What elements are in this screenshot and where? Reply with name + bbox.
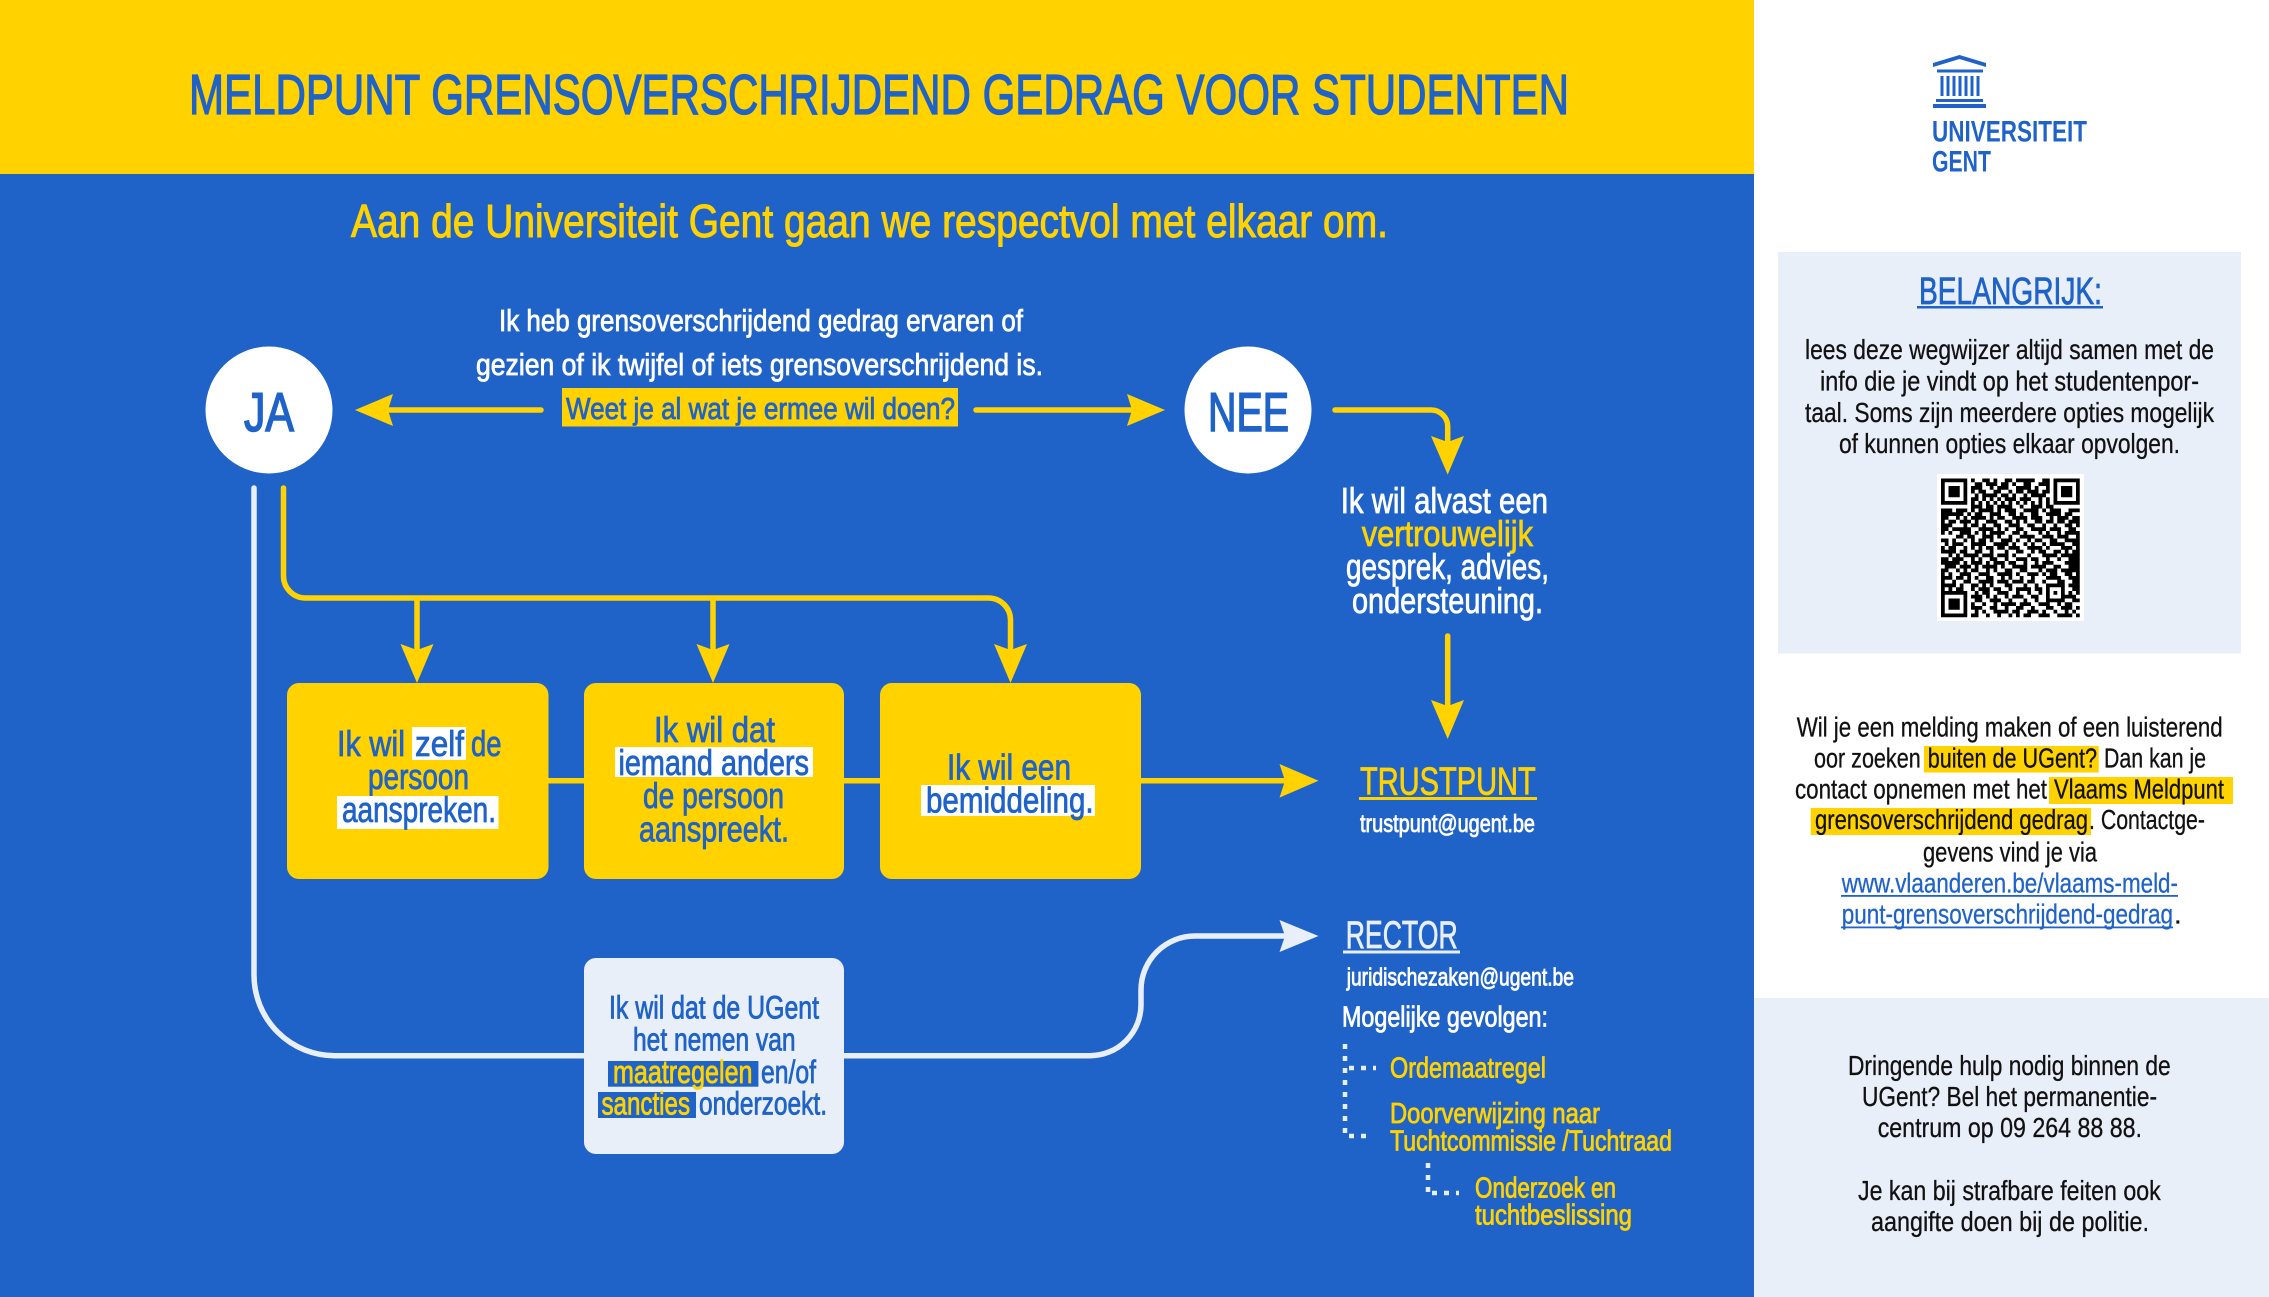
text: dringende hulp: UGent? Bel het permanentie- [1862,1081,2157,1112]
intro question text: gezien of ik twijfel of iets grensoverschrijdend is. [476,347,1043,382]
text block: melding buiten de UGent: oor zoeken [1814,742,1921,773]
option box: zelf aanspreken: de [471,723,502,764]
list: consequences: tuchtbeslissing [1475,1200,1632,1232]
intro question text [476,303,1043,426]
intro question text: Weet je al wat je ermee wil doen? [566,391,955,426]
text block: melding buiten de UGent: contact opnemen met het [1795,773,2047,804]
text: dringende hulp: Je kan bij strafbare feiten ook [1858,1175,2161,1206]
heading: Rector: RECTOR [1346,914,1458,957]
option box: UGent maatregelen: maatregelen [613,1054,752,1090]
option box: iemand anders: Ik wil dat [654,709,775,750]
subtitle: Aan de Universiteit Gent gaan we respectvol met elkaar om. [351,195,1388,247]
arrow: to NEE [976,394,1165,426]
intro question text: Ik heb grensoverschrijdend gedrag ervaren of [499,303,1023,338]
text: dringende hulp [1848,1050,2171,1237]
panel: yellow title band [0,0,1754,174]
option box: zelf aanspreken: Ik wil [337,723,405,764]
text block: melding buiten de UGent: gevens vind je via [1923,836,2098,868]
QR code [1937,474,2084,621]
list: consequences: Onderzoek en [1475,1172,1616,1204]
option box: iemand anders: de persoon [643,775,784,816]
text block: melding buiten de UGent: punt-grensoverschrijdend-gedrag [1842,898,2173,930]
text block: melding buiten de UGent: Dan kan je [2104,742,2206,773]
option box: UGent maatregelen: sancties [602,1086,690,1122]
option box: bemiddeling: Ik wil een [947,746,1071,788]
text: belangrijk body [1805,334,2214,459]
list: consequences: Ordemaatregel [1390,1052,1546,1084]
list: consequences: Doorverwijzing naar [1390,1098,1600,1130]
list: consequences [1390,1052,1672,1232]
arrow: to JA [355,394,541,426]
circle: NEE [1184,346,1312,474]
heading: belangrijk: BELANGRIJK: [1919,271,2102,313]
text: vertrouwelijk gesprek [1341,480,1549,621]
circle: JA: JA [244,381,294,443]
connector: JA to UGent measures and Rector [254,488,1318,1056]
title: MELDPUNT GRENSOVERSCHRIJDEND GEDRAG VOOR STUDENTEN [189,63,1569,127]
text: dringende hulp: Dringende hulp nodig binnen de [1848,1050,2171,1081]
logo: Universiteit Gent: GENT [1932,146,1991,179]
option box: zelf aanspreken: persoon [368,756,469,797]
option box: UGent maatregelen: en/of [761,1054,816,1090]
text block: melding buiten de UGent [1795,712,2233,930]
option box: bemiddeling: bemiddeling. [926,780,1094,820]
text: vertrouwelijk gesprek: vertrouwelijk [1362,513,1534,554]
option box: UGent maatregelen: het nemen van [633,1022,796,1058]
circle: NEE: NEE [1208,381,1289,443]
circle: JA [206,346,332,474]
option box: bemiddeling [880,683,1141,879]
arrow: NEE to confidential talk [1335,410,1464,475]
heading: Trustpunt: trustpunt@ugent.be [1360,810,1535,838]
option box: zelf aanspreken [287,683,548,879]
option box: UGent maatregelen: Ik wil dat de UGent [609,990,819,1026]
panel: belangrijk [1778,252,2241,654]
text: dringende hulp: centrum op 09 264 88 88. [1878,1112,2142,1143]
text: vertrouwelijk gesprek: ondersteuning. [1352,580,1543,621]
option box: UGent maatregelen: onderzoekt. [699,1086,827,1122]
connector: JA to three yellow options [284,488,1027,683]
text: vertrouwelijk gesprek: gesprek, advies, [1346,546,1549,587]
panel: dringende hulp [1754,998,2269,1297]
option box: zelf aanspreken: zelf [415,723,465,764]
arrow: confidential talk to Trustpunt [1431,636,1464,739]
text: belangrijk body: of kunnen opties elkaar opvolgen. [1839,428,2180,459]
text block: melding buiten de UGent: www.vlaanderen.be/vlaams-meld- [1841,868,2178,898]
logo: Universiteit Gent: UNIVERSITEIT [1932,116,2087,148]
connector: yellow options to Trustpunt [548,764,1318,798]
option box: iemand anders [584,683,844,879]
panel: main blue background [0,174,1754,1297]
option box: UGent maatregelen [584,958,844,1154]
text block: melding buiten de UGent: Vlaams Meldpunt [2054,773,2224,804]
text block: melding buiten de UGent: . Contactge- [2089,804,2205,835]
text block: melding buiten de UGent: . [2174,898,2182,930]
option box: zelf aanspreken: aanspreken. [342,789,496,830]
text: mogelijke gevolgen: Mogelijke gevolgen: [1342,1002,1548,1034]
option box: iemand anders: aanspreekt. [639,808,789,850]
heading: Trustpunt [1359,760,1537,838]
heading: Rector: juridischezaken@ugent.be [1346,964,1574,992]
text: belangrijk body: info die je vindt op het studentenpor- [1820,366,2199,397]
list: consequences: Tuchtcommissie /Tuchtraad [1390,1126,1672,1158]
tree: dotted consequence lines [1345,1044,1459,1194]
heading: Trustpunt: TRUSTPUNT [1360,760,1536,804]
heading: Rector [1343,914,1574,992]
text block: melding buiten de UGent: buiten de UGent? [1928,742,2097,773]
option box: iemand anders: iemand anders [618,742,809,783]
text: dringende hulp: aangifte doen bij de politie. [1871,1206,2149,1237]
text block: melding buiten de UGent: grensoverschrijdend gedrag [1815,804,2088,835]
text: vertrouwelijk gesprek: Ik wil alvast een [1341,480,1548,521]
logo: Universiteit Gent [1932,55,2087,179]
